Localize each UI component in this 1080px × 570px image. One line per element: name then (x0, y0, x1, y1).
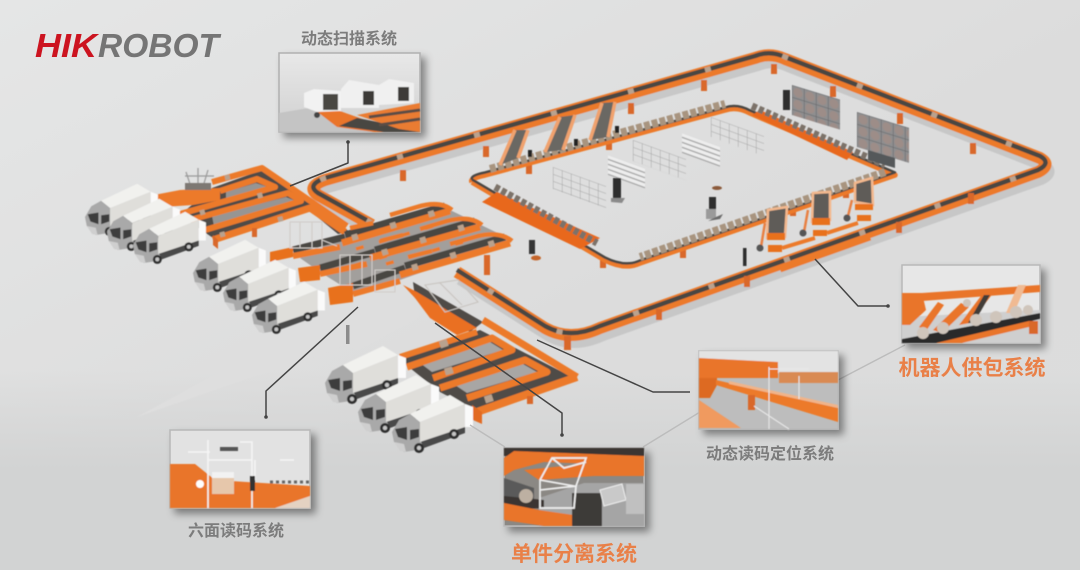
lower truck-unloading conveyors (400, 320, 577, 424)
wire shelves (553, 117, 764, 208)
top truck-unloading conveyors (154, 168, 350, 249)
inset: singulation (503, 447, 654, 536)
transfer to lower conveyors (403, 280, 483, 335)
inset: robot induction (901, 264, 1051, 354)
callout line: dynamic code reading (537, 340, 690, 392)
conveyor legs (400, 64, 976, 350)
callout line: singulation (435, 323, 564, 437)
heading: robot induction system: 机器人供包系统 (898, 356, 1046, 380)
inset: six-side code reading (169, 429, 320, 518)
robot feed chutes: top (500, 102, 619, 165)
logo: HIK (35, 27, 99, 64)
white shelves (608, 133, 720, 188)
robot feed chutes: bottom (756, 178, 873, 252)
sorting system artwork (85, 53, 1049, 453)
parcel feed block: left (482, 192, 600, 249)
callout line: dynamic scanning (290, 140, 350, 186)
inset: dynamic scanning (278, 52, 431, 143)
decorative connector to insets (470, 345, 905, 447)
ramp platform (137, 292, 420, 417)
parcel racks (792, 85, 909, 168)
parcel feed block: upper right (752, 110, 853, 160)
heading: dynamic code reading and positioning system: 动态读码定位系统 (706, 444, 834, 463)
callout line: six-side reading (264, 307, 358, 419)
outer conveyor loop (313, 53, 1049, 342)
truck group: middle (193, 240, 325, 334)
logo (35, 27, 222, 64)
forklifts and workers (529, 90, 790, 266)
middle sorting lanes (270, 204, 512, 305)
platform post (346, 325, 350, 344)
floor slab (0, 370, 1080, 570)
callout line: robot induction (815, 259, 890, 308)
truck group: bottom (325, 346, 473, 453)
heading: dynamic scanning system: 动态扫描系统 (301, 29, 397, 48)
heading: singulation system: 单件分离系统 (511, 542, 637, 566)
heading: six-side code reading system: 六面读码系统 (188, 521, 284, 540)
truck group: top (85, 184, 206, 264)
logo: ROBOT (98, 27, 222, 64)
inner conveyor loop (472, 104, 895, 266)
inset: dynamic code reading and positioning (698, 350, 849, 440)
